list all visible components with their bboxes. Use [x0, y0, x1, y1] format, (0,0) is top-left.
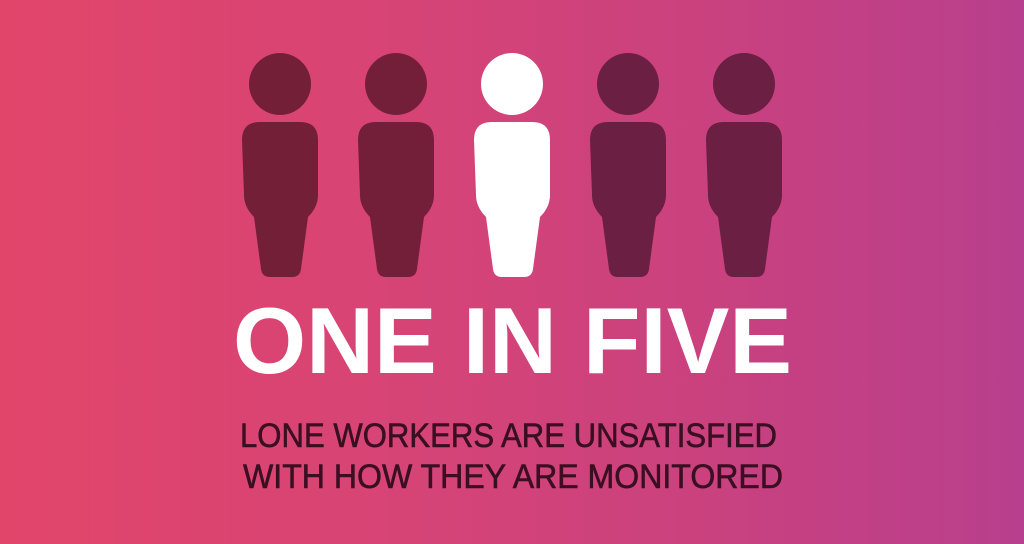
subtitle: WITH HOW THEY ARE MONITORED	[243, 458, 783, 496]
icon: person 3 highlighted	[474, 53, 550, 277]
subtitle: LONE WORKERS ARE UNSATISFIED	[240, 417, 777, 455]
person icons row	[242, 53, 782, 277]
icon: person 2	[358, 53, 434, 277]
headline: ONE IN FIVE	[233, 288, 792, 393]
icon: person 4	[590, 53, 666, 277]
icon: person 1	[242, 53, 318, 277]
subtitle	[240, 417, 783, 496]
icon: person 5	[706, 53, 782, 277]
